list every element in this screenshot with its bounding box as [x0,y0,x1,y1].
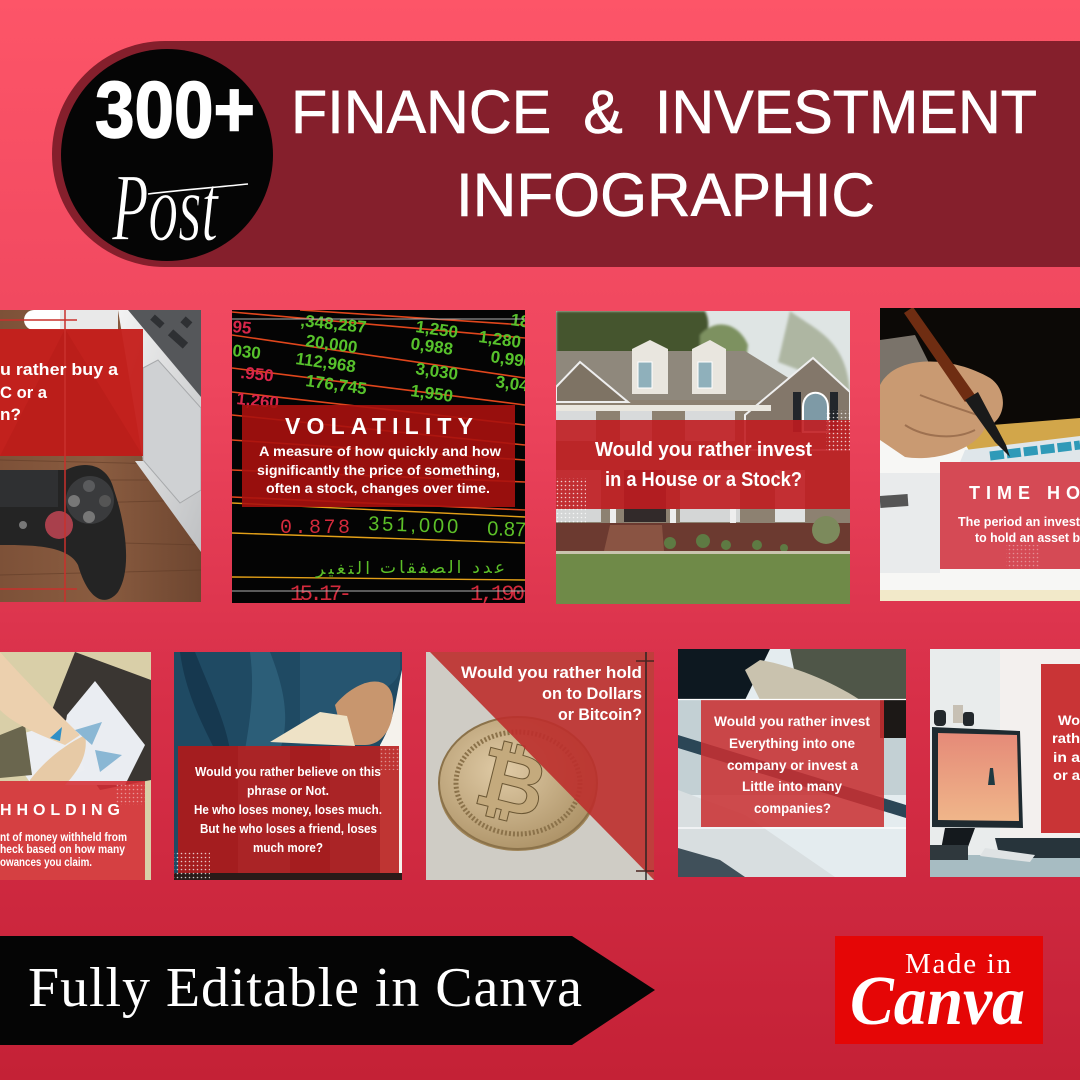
text: question [0,363,118,420]
red box [0,329,143,456]
badge: made in canva: Made in [905,948,1012,980]
panel: stock ticker photo: عدد الصفقات [380,558,505,577]
panel: hand writing photo [880,307,1080,601]
text: house question: in a House or a Stock? [605,469,802,491]
text: monitor question: or a [1053,767,1080,783]
text: volatility: often a stock, changes over time. [266,480,490,496]
dormers [632,340,726,394]
pen [904,307,975,402]
text: question: n? [0,405,21,424]
text: phrase question: phrase or Not. [247,784,329,798]
panel: stock ticker photo: 351,000 [368,513,459,538]
monitor [932,727,1023,828]
panel: stock ticker photo: 0,990 [489,347,534,372]
laptop [118,310,201,552]
panel: documents and ruler photo [678,649,906,877]
text: phrase question: Would you rather believe on this [195,765,381,779]
panel: stock ticker photo: 112,968 [294,349,357,376]
panel: stock ticker photo: 030 [232,341,262,363]
badge: 300+ post: 300+ [95,65,255,154]
text: time horizon: to hold an asset b [975,531,1080,545]
lawn [556,551,850,604]
panel: stock ticker photo: 15.17- [290,582,352,607]
panel: stock ticker photo [232,310,540,607]
text: volatility: VOLATILITY [285,413,473,439]
text: volatility: significantly the price of something, [257,462,500,478]
panel: hands with report photo [0,652,151,880]
text: phrase question: But he who loses a friend, loses [200,822,377,836]
hand [880,362,1003,458]
text: phrase question [194,765,382,855]
text: bitcoin question: on to Dollars [542,684,642,703]
text: house question [595,441,812,486]
text: volatility [257,413,501,496]
trees [556,311,850,390]
text: diversify question [714,714,871,816]
text: bitcoin question [461,666,642,720]
title [291,78,1037,229]
text: withholding: nt of money withheld from [0,832,127,844]
text: volatility: A measure of how quickly and how [259,443,501,459]
text: diversify question: companies? [754,801,831,816]
panel: stock ticker photo: 95 [232,317,252,338]
panel: stock ticker photo: التغير [315,559,370,578]
arched window [803,393,828,432]
panel: stock ticker photo: 1,190 [470,582,525,607]
shrubs [664,516,840,552]
panel: stock ticker photo: 20,000 [304,331,359,357]
text: time horizon: The period an invest [958,515,1080,529]
text: time horizon [958,483,1080,545]
panel: money in pocket photo [174,652,402,880]
text: withholding: heck based on how many [0,844,126,856]
text: monitor question: Wo [1058,712,1080,728]
text: bitcoin question: or Bitcoin? [558,705,642,724]
text: bitcoin question: Would you rather hold [461,663,642,682]
title: INFOGRAPHIC [456,161,875,229]
panel: stock ticker photo: 181 [509,310,540,333]
text: question: u rather buy a [0,360,119,379]
walls [556,400,850,523]
panel: stock ticker photo: 1,950 [409,381,454,406]
panel: desktop monitor photo [930,649,1080,879]
badge: made in canva: Canva [850,963,1025,1040]
panel: stock ticker photo: ,348,287 [300,311,367,337]
panel: stock ticker photo: 0.87 [487,518,527,541]
text: diversify question: Little into many [742,779,842,794]
panel: stock ticker photo: 0.878 [280,517,350,540]
text: withholding: HHOLDING [0,802,120,819]
text: phrase question: much more? [253,841,323,855]
controller [0,465,126,600]
panel: stock ticker photo: 3,040 [494,372,539,397]
badge: 300+ post: Post [111,154,219,261]
text: diversify question: Everything into one [729,736,855,751]
text: monitor question [1053,716,1080,780]
panel: stock ticker photo: 176,745 [304,371,368,399]
coin: ₿ [467,728,556,836]
text: phrase question: He who loses money, loses much. [194,803,382,817]
banner: fully editable in canva [0,936,655,1045]
panel: stock ticker photo: 1,250 [414,317,459,342]
text: monitor question: rath [1052,730,1080,746]
panel: house photo [556,311,850,604]
panel: stock ticker photo: 0,988 [409,334,454,359]
banner: fully editable in canva: Fully Editable in Canva [28,957,582,1019]
panel: stock ticker photo: 1,260 [236,389,280,412]
panel: bitcoin photo [426,652,654,880]
roof [556,351,850,400]
text: time horizon: TIME HO [969,483,1080,503]
text: withholding [0,802,127,869]
text: question: C or a [0,383,48,402]
text: monitor question: in a [1053,749,1080,765]
text: diversify question: Would you rather invest [714,714,871,729]
badge: 300+ post [61,49,273,261]
header band [52,41,1080,267]
title: FINANCE & INVESTMENT [291,78,1037,146]
band [556,420,850,509]
badge: made in canva [835,936,1043,1044]
panel: stock ticker photo: 1,280 [477,327,522,352]
text: withholding: owances you claim. [0,857,92,869]
text: house question: Would you rather invest [595,439,812,461]
desk [930,855,1080,877]
panel: stock ticker photo: .950 [240,363,274,385]
text: diversify question: company or invest a [727,758,858,773]
coin [439,717,597,851]
panel: game controller photo [0,310,201,602]
panel: stock ticker photo: 3,030 [414,359,459,384]
